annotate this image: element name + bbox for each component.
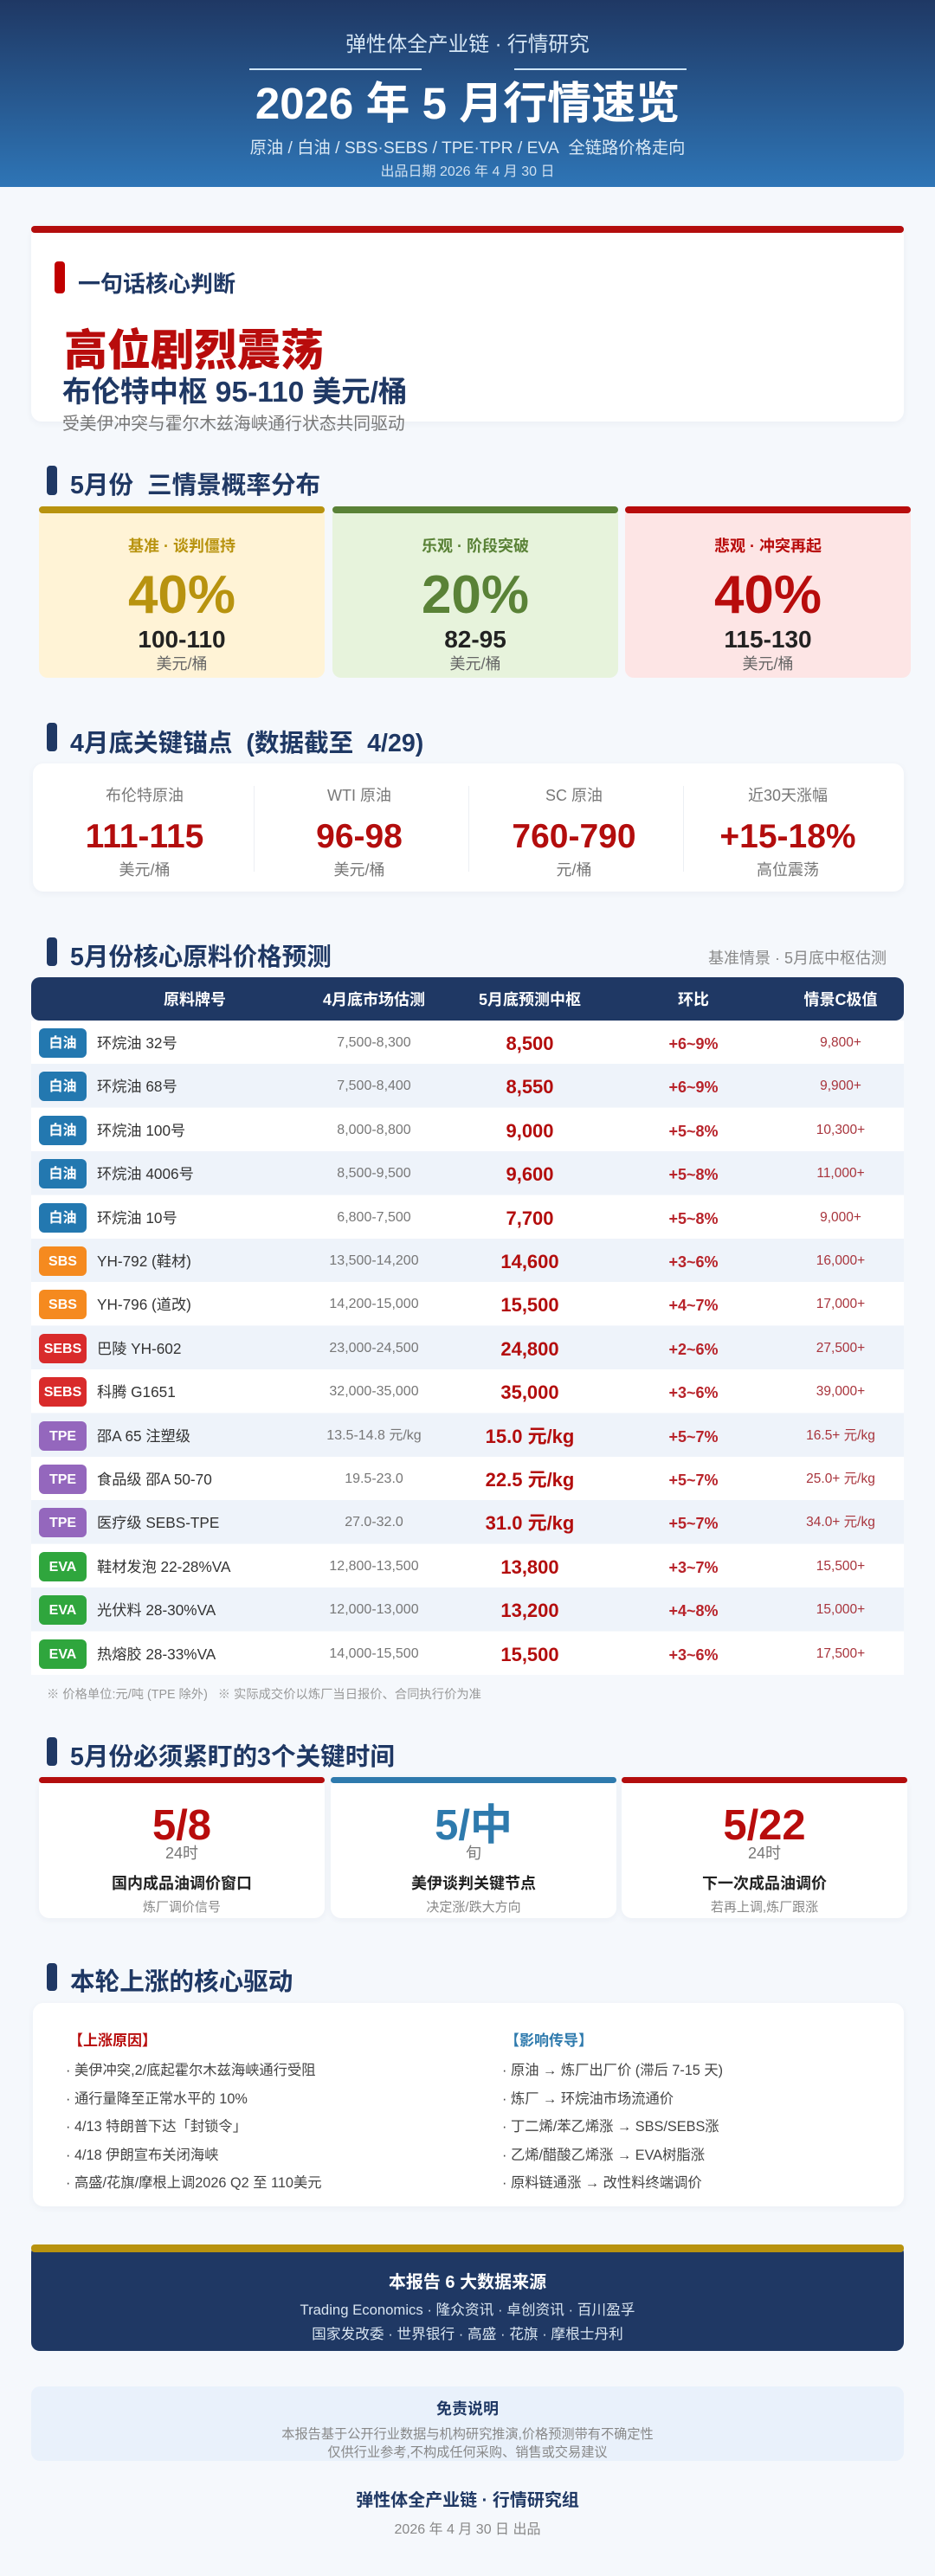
label: SC 原油 — [545, 787, 603, 804]
sources line 2: 国家发改委 · 世界银行 · 高盛 · 花旗 · 摩根士丹利 — [312, 2326, 623, 2342]
row: 环烷油 10号: 7,700 — [506, 1208, 554, 1229]
causes item 2: · 通行量降至正常水平的 10% — [66, 2091, 248, 2107]
event note: 炼厂调价信号 — [143, 1900, 221, 1915]
heading: core drivers: 本轮上涨的核心驱动 — [70, 1968, 293, 1996]
row: 环烷油 32号: 8,500 — [506, 1033, 554, 1054]
transmission item 5: · 原料链通涨 → 改性料终端调价 — [502, 2175, 702, 2191]
probability: 40% — [128, 565, 235, 625]
row: 环烷油 32号: 9,800+ — [820, 1035, 861, 1050]
panel: mid May — [331, 1777, 616, 1918]
row: 邵A 65: 15.0 元/kg — [486, 1426, 574, 1447]
panel: optimistic scenario — [332, 506, 618, 678]
row: 光伏料: 光伏料 28-30%VA — [97, 1601, 216, 1619]
scenario label: 基准 · 谈判僵持 — [128, 538, 235, 555]
row: 环烷油 32号: 7,500-8,300 — [337, 1035, 411, 1050]
event note: 决定涨/跌大方向 — [426, 1900, 521, 1915]
row: 环烷油 68号: 9,900+ — [820, 1079, 861, 1093]
transmission item 4: · 乙烯/醋酸乙烯涨 → EVA树脂涨 — [502, 2148, 705, 2163]
table header: 4月底市场估测 — [323, 991, 425, 1008]
row: 环烷油 68号: 环烷油 68号 — [97, 1078, 177, 1095]
row: YH-792: 13,500-14,200 — [329, 1253, 419, 1268]
row: 环烷油 4006号: 8,500-9,500 — [337, 1166, 411, 1181]
table header: 原料牌号 — [164, 991, 226, 1008]
date: 5/中 — [435, 1802, 513, 1849]
row: 环烷油 68号: 8,550 — [506, 1076, 554, 1098]
Brent range: 布伦特中枢 95-110 美元/桶 — [62, 377, 407, 409]
unit: 美元/桶 — [333, 861, 384, 879]
date suffix: 24时 — [165, 1845, 198, 1862]
row: 食品级: 19.5-23.0 — [345, 1472, 403, 1486]
row: YH-792 — [31, 1239, 904, 1282]
row: 环烷油 4006号: +5~8% — [668, 1166, 719, 1183]
scenario label: 乐观 · 阶段突破 — [422, 538, 529, 555]
row: 邵A 65: 13.5-14.8 元/kg — [326, 1428, 422, 1443]
unit: 美元/桶 — [742, 655, 793, 673]
driver note: 受美伊冲突与霍尔木兹海峡通行状态共同驱动 — [62, 415, 405, 434]
header banner — [0, 0, 935, 187]
section marker: drivers — [47, 1963, 57, 1991]
event note: 若再上调,炼厂跟涨 — [711, 1900, 818, 1915]
row: 科腾 G1651: 39,000+ — [816, 1384, 865, 1399]
section marker: scenarios — [47, 466, 57, 495]
top bar — [625, 506, 911, 513]
row: 环烷油 68号: 白油 — [48, 1079, 76, 1094]
scenario label: 悲观 · 冲突再起 — [714, 538, 822, 555]
causes item 4: · 4/18 伊朗宣布关闭海峡 — [66, 2148, 218, 2163]
footer organisation: 弹性体全产业链 · 行情研究组 — [356, 2491, 579, 2510]
unit: 元/桶 — [556, 861, 592, 879]
section marker: forecast — [47, 937, 57, 966]
row: 鞋材发泡: 15,500+ — [816, 1559, 865, 1574]
row: 邵A 65: 邵A 65 注塑级 — [97, 1427, 190, 1445]
column: causes — [66, 2032, 322, 2191]
panel: date 5/22 — [622, 1777, 907, 1918]
table header — [31, 977, 904, 1021]
row: 巴陵 YH-602: 23,000-24,500 — [329, 1341, 419, 1356]
disclaimer line 2: 仅供行业参考,不构成任何采购、销售或交易建议 — [327, 2445, 608, 2460]
value: 760-790 — [512, 818, 636, 855]
row: 科腾 G1651: SEBS — [44, 1385, 81, 1400]
top bar — [622, 1777, 907, 1783]
row: 鞋材发泡: +3~7% — [668, 1559, 719, 1576]
heading: scenario probabilities: 5月份 三情景概率分布 — [70, 472, 320, 499]
row: 环烷油 100号: 8,000-8,800 — [337, 1123, 411, 1137]
row: 环烷油 4006号: 白油 — [48, 1167, 76, 1182]
row: YH-796: 17,000+ — [816, 1297, 865, 1311]
row: 医疗级: 医疗级 SEBS-TPE — [97, 1514, 219, 1531]
row: 巴陵 YH-602: +2~6% — [668, 1341, 719, 1358]
panel: date 5/8 — [39, 1777, 325, 1918]
row: 邵A 65: +5~7% — [668, 1428, 719, 1446]
transmission heading: 【影响传导】 — [505, 2032, 593, 2049]
row: 巴陵 YH-602: 24,800 — [500, 1338, 559, 1360]
unit: 美元/桶 — [449, 655, 500, 673]
disclaimer line 1: 本报告基于公开行业数据与机构研究推演,价格预测带有不确定性 — [281, 2427, 654, 2442]
row: YH-792: 14,600 — [500, 1251, 559, 1272]
heading: price forecast: 5月份核心原料价格预测 — [70, 943, 332, 971]
row: 环烷油 100号: 白油 — [48, 1124, 76, 1138]
row: 热熔胶: 15,500 — [500, 1644, 559, 1665]
row: 食品级: 22.5 元/kg — [486, 1469, 574, 1491]
row: YH-792: SBS — [48, 1254, 77, 1269]
price range: 115-130 — [724, 626, 812, 653]
price range: 82-95 — [444, 626, 506, 653]
row: 食品级: +5~7% — [668, 1472, 719, 1489]
row: 鞋材发泡: 12,800-13,500 — [329, 1559, 419, 1574]
row: 光伏料: 12,000-13,000 — [329, 1602, 419, 1617]
table header: 情景C极值 — [803, 991, 878, 1008]
row: 环烷油 100号: 环烷油 100号 — [97, 1122, 185, 1139]
anchor: WTI — [316, 787, 403, 879]
price range: 100-110 — [138, 626, 226, 653]
row: YH-796: YH-796 (道改) — [97, 1296, 191, 1313]
row: YH-792: YH-792 (鞋材) — [97, 1253, 191, 1270]
row: 科腾 G1651: 32,000-35,000 — [329, 1384, 419, 1399]
top bar — [39, 1777, 325, 1783]
panel: drivers — [33, 2003, 904, 2206]
unit: 美元/桶 — [119, 861, 170, 879]
row: 环烷油 10号: +5~8% — [668, 1210, 719, 1227]
row: YH-792: +3~6% — [668, 1253, 719, 1271]
table header: 5月底预测中枢 — [479, 991, 581, 1008]
row: 食品级: 食品级 邵A 50-70 — [97, 1471, 212, 1488]
row: 鞋材发泡: 鞋材发泡 22-28%VA — [97, 1558, 230, 1575]
disclaimer title: 免责说明 — [436, 2400, 499, 2418]
row: 环烷油 100号: +5~8% — [668, 1123, 719, 1140]
row: YH-796: +4~7% — [668, 1297, 719, 1314]
panel: base scenario — [39, 506, 325, 678]
row: 光伏料: 13,200 — [500, 1600, 559, 1621]
row: YH-796: 15,500 — [500, 1294, 559, 1316]
row: 环烷油 4006号: 11,000+ — [816, 1166, 865, 1181]
date: 5/8 — [152, 1802, 211, 1849]
date suffix: 24时 — [748, 1845, 781, 1862]
unit: 美元/桶 — [156, 655, 208, 673]
panel: data sources — [31, 2244, 904, 2351]
heading: key dates: 5月份必须紧盯的3个关键时间 — [70, 1743, 395, 1771]
row: 环烷油 10号: 白油 — [48, 1211, 76, 1226]
row: 邵A 65 — [31, 1414, 904, 1457]
row: 热熔胶: EVA — [49, 1647, 76, 1662]
header rule left — [249, 68, 422, 70]
row: 科腾 G1651 — [31, 1369, 904, 1413]
accent marker — [55, 261, 65, 293]
row: 邵A 65: TPE — [49, 1429, 76, 1444]
label: 布伦特原油 — [106, 787, 184, 804]
header rule right — [514, 68, 687, 70]
row: 光伏料: 15,000+ — [816, 1602, 865, 1617]
row: 环烷油 100号: 9,000 — [506, 1120, 554, 1142]
anchor: 30 day change — [719, 787, 856, 879]
event title: 美伊谈判关键节点 — [411, 1875, 536, 1892]
row: 环烷油 4006号 — [31, 1151, 904, 1195]
column: transmission — [502, 2032, 723, 2191]
row: 环烷油 32号: +6~9% — [668, 1035, 719, 1053]
panel: pessimistic scenario — [625, 506, 911, 678]
row: 环烷油 100号 — [31, 1108, 904, 1151]
probability: 40% — [714, 565, 822, 625]
headline judgement: 高位剧烈震荡 — [64, 326, 324, 375]
table footnote: ※ 价格单位:元/吨 (TPE 除外) ※ 实际成交价以炼厂当日报价、合同执行价为准 — [47, 1688, 481, 1702]
value: +15-18% — [719, 818, 856, 855]
row: 热熔胶: 14,000-15,500 — [329, 1646, 419, 1661]
row: 热熔胶: +3~6% — [668, 1646, 719, 1664]
top bar — [331, 1777, 616, 1783]
row: 热熔胶 — [31, 1632, 904, 1675]
row: 食品级: TPE — [49, 1472, 76, 1487]
row: 医疗级 — [31, 1500, 904, 1543]
row: 热熔胶: 17,500+ — [816, 1646, 865, 1661]
row: 环烷油 4006号: 9,600 — [506, 1163, 554, 1185]
row: 巴陵 YH-602: SEBS — [44, 1342, 81, 1356]
row: 环烷油 68号: +6~9% — [668, 1079, 719, 1096]
panel: April anchors — [33, 763, 904, 892]
row: 巴陵 YH-602 — [31, 1326, 904, 1369]
row: 光伏料: EVA — [49, 1603, 76, 1618]
table: raw material price forecast — [31, 977, 904, 1021]
row: 科腾 G1651: 科腾 G1651 — [97, 1383, 176, 1401]
date suffix: 旬 — [466, 1845, 481, 1862]
row: 巴陵 YH-602: 27,500+ — [816, 1341, 865, 1356]
top bar — [39, 506, 325, 513]
sources line 1: Trading Economics · 隆众资讯 · 卓创资讯 · 百川盈孚 — [300, 2302, 635, 2318]
gold top bar — [31, 2244, 904, 2252]
panel heading: 一句话核心判断 — [78, 271, 235, 297]
row: 光伏料 — [31, 1587, 904, 1631]
main title: 2026 年 5 月行情速览 — [255, 79, 680, 128]
anchor: Brent — [86, 787, 203, 879]
transmission item 2: · 炼厂 → 环烷油市场流通价 — [502, 2091, 674, 2107]
header kicker: 弹性体全产业链 · 行情研究 — [345, 34, 590, 56]
row: YH-796: SBS — [48, 1298, 77, 1312]
row: 环烷油 32号 — [31, 1021, 904, 1064]
row: 环烷油 4006号: 环烷油 4006号 — [97, 1165, 194, 1182]
row: 环烷油 10号: 环烷油 10号 — [97, 1209, 177, 1227]
top bar — [332, 506, 618, 513]
row: 医疗级: TPE — [49, 1516, 76, 1530]
row: 热熔胶: 热熔胶 28-33%VA — [97, 1645, 216, 1663]
row: 科腾 G1651: +3~6% — [668, 1384, 719, 1401]
event title: 下一次成品油调价 — [702, 1875, 827, 1892]
transmission item 3: · 丁二烯/苯乙烯涨 → SBS/SEBS涨 — [502, 2119, 719, 2135]
forecast basis note: 基准情景 · 5月底中枢估测 — [708, 950, 887, 967]
row: 环烷油 10号: 6,800-7,500 — [337, 1210, 411, 1225]
row: 环烷油 32号: 环烷油 32号 — [97, 1034, 177, 1052]
value: 111-115 — [86, 818, 203, 855]
causes item 3: · 4/13 特朗普下达「封锁令」 — [66, 2119, 247, 2135]
header subtitle: 原油 / 白油 / SBS·SEBS / TPE·TPR / EVA 全链路价格走向 — [250, 139, 685, 158]
row: 鞋材发泡: EVA — [49, 1560, 76, 1575]
row: 医疗级: +5~7% — [668, 1515, 719, 1532]
row: 鞋材发泡: 13,800 — [500, 1556, 559, 1578]
row: 环烷油 32号: 白油 — [48, 1036, 76, 1051]
row: 环烷油 10号: 9,000+ — [820, 1210, 861, 1225]
probability: 20% — [422, 565, 529, 625]
event title: 国内成品油调价窗口 — [112, 1875, 252, 1892]
publish date: 出品日期 2026 年 4 月 30 日 — [381, 164, 554, 179]
table header: 环比 — [678, 991, 709, 1008]
footer date: 2026 年 4 月 30 日 出品 — [395, 2522, 540, 2537]
row: 巴陵 YH-602: 巴陵 YH-602 — [97, 1340, 181, 1357]
causes item 5: · 高盛/花旗/摩根上调2026 Q2 至 110美元 — [66, 2175, 322, 2191]
row: 食品级: 25.0+ 元/kg — [806, 1472, 875, 1486]
label: 近30天涨幅 — [748, 787, 828, 804]
sources title: 本报告 6 大数据来源 — [389, 2273, 546, 2292]
row: YH-796 — [31, 1282, 904, 1325]
row: 鞋材发泡 — [31, 1544, 904, 1587]
row: 医疗级: 34.0+ 元/kg — [806, 1515, 875, 1530]
row: 环烷油 68号: 7,500-8,400 — [337, 1079, 411, 1093]
panel: core judgement — [31, 226, 904, 422]
row: 食品级 — [31, 1457, 904, 1500]
heading: end of April anchors: 4月底关键锚点 (数据截至 4/29) — [70, 730, 423, 757]
date: 5/22 — [723, 1802, 806, 1849]
row: 环烷油 10号 — [31, 1195, 904, 1239]
causes heading: 【上涨原因】 — [68, 2032, 157, 2049]
value: 96-98 — [316, 818, 403, 855]
transmission item 1: · 原油 → 炼厂出厂价 (滞后 7-15 天) — [502, 2063, 723, 2078]
label: WTI 原油 — [327, 787, 391, 804]
row: 邵A 65: 16.5+ 元/kg — [806, 1428, 875, 1443]
causes item 1: · 美伊冲突,2/底起霍尔木兹海峡通行受阻 — [66, 2063, 316, 2078]
row: 光伏料: +4~8% — [668, 1602, 719, 1620]
row: 科腾 G1651: 35,000 — [500, 1381, 559, 1403]
row: 医疗级: 31.0 元/kg — [486, 1512, 574, 1534]
row: 医疗级: 27.0-32.0 — [345, 1515, 403, 1530]
red top bar — [31, 226, 904, 233]
section marker: key dates — [47, 1737, 57, 1766]
row: YH-792: 16,000+ — [816, 1253, 865, 1268]
row: YH-796: 14,200-15,000 — [329, 1297, 419, 1311]
section marker: anchors — [47, 723, 57, 751]
row: 环烷油 68号 — [31, 1064, 904, 1107]
unit: 高位震荡 — [757, 861, 819, 879]
anchor: SC — [512, 787, 636, 879]
row: 环烷油 100号: 10,300+ — [816, 1123, 865, 1137]
panel: disclaimer — [31, 2386, 904, 2461]
